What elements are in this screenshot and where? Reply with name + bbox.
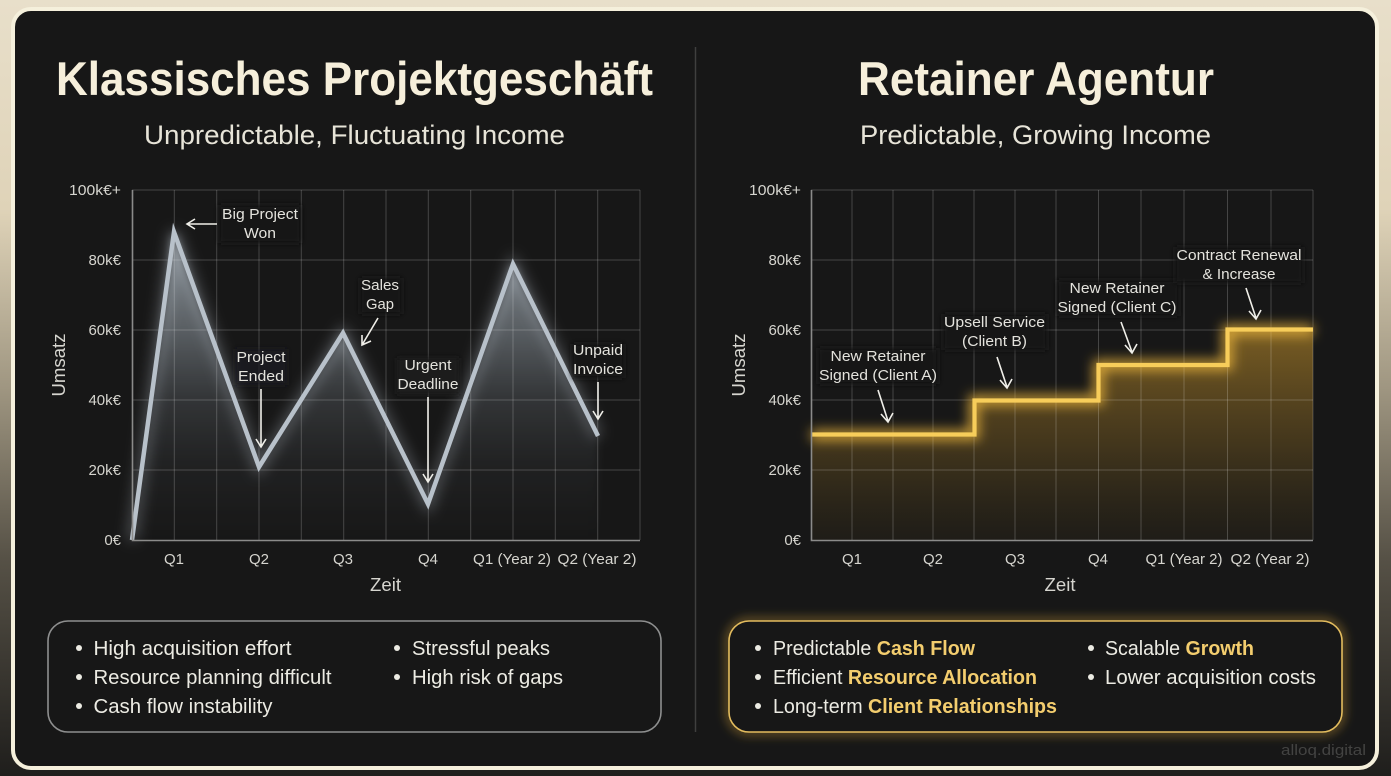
chart: growing revenue xyxy=(729,182,1313,595)
x axis labels: Q1 xyxy=(164,551,184,568)
x axis labels: Q3 xyxy=(1005,551,1025,568)
annotation: contract renewal xyxy=(1175,247,1303,319)
y axis labels: 80k€ xyxy=(88,252,122,269)
y axis labels: 100k€+ xyxy=(749,182,801,199)
step line glow xyxy=(811,330,1313,435)
x axis labels xyxy=(164,551,636,568)
annotation: new retainer client C xyxy=(1057,280,1179,353)
bullet list right xyxy=(394,637,563,689)
annotation: upsell client B xyxy=(943,314,1047,388)
step line xyxy=(811,330,1313,434)
annotation: contract renewal: & Increase xyxy=(1202,266,1276,283)
annotation: big project won xyxy=(187,205,301,243)
bullet list right xyxy=(1088,637,1316,689)
x axis labels: Q2 (Year 2) xyxy=(1230,551,1310,568)
annotation: upsell client B: (Client B) xyxy=(962,333,1027,350)
panel: retainer agency xyxy=(729,52,1342,732)
chart: fluctuating revenue xyxy=(49,182,640,595)
subheading: unpredictable income: Unpredictable, Fluctuating Income xyxy=(144,120,565,150)
axes xyxy=(812,190,1313,540)
x axis labels: Q1 xyxy=(842,551,862,568)
y axis labels: 0€ xyxy=(784,532,802,549)
bullet list right: High risk of gaps xyxy=(412,666,563,689)
annotation: project ended xyxy=(235,349,287,447)
annotation: unpaid invoice xyxy=(572,342,624,419)
y axis labels: 60k€ xyxy=(88,322,122,339)
y axis labels: 40k€ xyxy=(768,392,802,409)
x axis labels: Q2 (Year 2) xyxy=(558,551,636,568)
x axis title: Zeit xyxy=(1044,575,1076,595)
x axis labels: Q1 (Year 2) xyxy=(1146,551,1222,568)
watermark: alloq.digital xyxy=(1281,742,1366,759)
bullet list left: Predictable Cash Flow xyxy=(773,637,975,660)
y axis labels xyxy=(749,182,802,549)
y axis labels: 60k€ xyxy=(768,322,802,339)
annotation: unpaid invoice: Unpaid xyxy=(573,342,623,359)
revenue line xyxy=(132,232,598,540)
x axis labels: Q2 xyxy=(923,551,943,568)
x axis labels: Q3 xyxy=(333,551,353,568)
y axis labels: 20k€ xyxy=(88,462,122,479)
annotation: sales gap: Sales xyxy=(361,277,399,294)
bullet list left: High acquisition effort xyxy=(94,637,292,660)
y axis labels: 100k€+ xyxy=(69,182,121,199)
bullet list left xyxy=(76,637,332,718)
annotation: urgent deadline: Urgent xyxy=(404,357,452,374)
annotation: urgent deadline: Deadline xyxy=(398,376,458,393)
chart grid xyxy=(811,190,1313,540)
panel: classic project business xyxy=(48,52,661,732)
axes xyxy=(132,190,640,540)
bullet list left: Resource planning difficult xyxy=(94,666,332,689)
bullet list right: Stressful peaks xyxy=(412,637,550,660)
y axis labels: 80k€ xyxy=(768,252,802,269)
bullet list left: Efficient Resource Allocation xyxy=(773,666,1037,689)
annotation: project ended: Project xyxy=(236,349,286,366)
annotation: project ended: Ended xyxy=(238,368,284,385)
subheading: predictable income: Predictable, Growing Income xyxy=(860,120,1211,150)
annotation: new retainer client A xyxy=(818,348,938,422)
annotation: unpaid invoice: Invoice xyxy=(573,361,623,378)
x axis labels: Q1 (Year 2) xyxy=(473,551,551,568)
annotation: sales gap: Gap xyxy=(366,296,394,313)
annotation: contract renewal: Contract Renewal xyxy=(1176,247,1302,264)
annotation: new retainer client A: New Retainer xyxy=(830,348,926,365)
annotation: big project won: Won xyxy=(244,225,276,242)
y axis title: Umsatz xyxy=(49,333,69,397)
x axis labels: Q2 xyxy=(249,551,269,568)
bullet list right: Lower acquisition costs xyxy=(1105,666,1316,689)
bullet list left: Cash flow instability xyxy=(94,695,273,718)
callout: retainer benefits xyxy=(729,621,1342,732)
bullet list left: Long-term Client Relationships xyxy=(773,695,1057,718)
annotation: new retainer client C: Signed (Client C) xyxy=(1058,299,1176,316)
area under step line xyxy=(811,330,1313,540)
y axis labels: 0€ xyxy=(104,532,122,549)
annotation: new retainer client C: New Retainer xyxy=(1070,280,1165,297)
callout glow xyxy=(729,621,1342,732)
area under revenue line xyxy=(132,232,598,540)
heading: Retainer Agentur: Retainer Agentur xyxy=(858,52,1214,105)
y axis labels xyxy=(69,182,122,549)
x axis labels: Q4 xyxy=(418,551,438,568)
x axis labels xyxy=(842,551,1310,568)
x axis labels: Q4 xyxy=(1088,551,1108,568)
y axis labels: 20k€ xyxy=(768,462,802,479)
heading: Klassisches Projektgeschäft: Klassisches Projektgeschäft xyxy=(56,52,653,105)
annotation: big project won: Big Project xyxy=(222,206,299,223)
annotation: sales gap xyxy=(360,277,402,345)
annotation: new retainer client A: Signed (Client A) xyxy=(819,367,937,384)
y axis labels: 40k€ xyxy=(88,392,122,409)
annotation: urgent deadline xyxy=(397,357,459,482)
centre divider xyxy=(694,47,696,732)
y axis title: Umsatz xyxy=(729,333,749,397)
chart grid xyxy=(132,190,640,540)
bullet list left xyxy=(755,637,1057,718)
x axis title: Zeit xyxy=(370,575,401,595)
callout: classic drawbacks xyxy=(48,621,661,732)
annotation: upsell client B: Upsell Service xyxy=(944,314,1045,331)
line glow xyxy=(132,232,598,540)
bullet list right: Scalable Growth xyxy=(1105,637,1254,660)
